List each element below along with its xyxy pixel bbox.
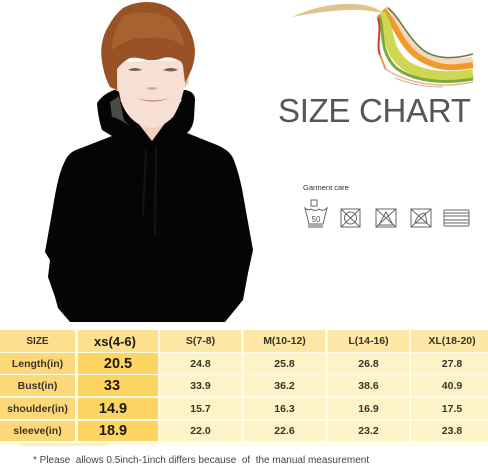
row: sleeve: 22.0 (190, 425, 211, 437)
row: bust: 36.2 (274, 380, 295, 392)
hood lining (110, 96, 130, 126)
row: shoulder: 16.3 (274, 402, 295, 414)
garment care heading: Garment care (303, 183, 349, 192)
row: sleeve: 22.6 (274, 425, 295, 437)
row: sleeve: 23.8 (442, 425, 462, 437)
table bottom strip (20, 443, 108, 446)
icon: do not tumble dry (341, 209, 360, 227)
row: bust: 38.6 (358, 380, 379, 392)
row: sleeve (0, 421, 488, 441)
row: bust: 33.9 (190, 380, 211, 392)
photo: boy in black hoodie (45, 2, 253, 322)
neck (120, 100, 182, 141)
row: bust: 40.9 (442, 380, 462, 392)
eyes and smile (128, 68, 142, 71)
footnote: * Please allows 0.5inch-1inch differs because of the manual measurement (33, 455, 369, 466)
drawstring shading (143, 148, 156, 235)
row: length: 24.8 (190, 358, 211, 370)
icon: flat dry lines (444, 210, 469, 226)
care icons (304, 200, 470, 228)
icon: wash 50: 50 (312, 215, 321, 224)
row: length: 20.5 (104, 356, 132, 372)
row: length: 25.8 (274, 358, 295, 370)
decorative swoosh graphic (292, 4, 474, 88)
size table (0, 330, 488, 446)
ears (108, 68, 119, 92)
row: shoulder (0, 398, 488, 419)
row: bust: Bust(in) (18, 380, 57, 392)
hood and hoodie body (45, 90, 253, 322)
row: shoulder: 14.9 (99, 400, 127, 416)
row: sleeve: 18.9 (99, 423, 127, 439)
face (117, 60, 187, 128)
icon: do not bleach (376, 209, 396, 227)
row: sleeve: sleeve(in) (13, 425, 62, 437)
header row: xs(4-6) (94, 334, 136, 348)
icon: do not iron (411, 209, 431, 227)
row: shoulder: 17.5 (442, 402, 462, 414)
header row: SIZE (26, 336, 49, 346)
row: length (0, 353, 488, 374)
row: length: Length(in) (12, 358, 63, 370)
row: shoulder: 15.7 (190, 402, 211, 414)
header row: XL(18-20) (428, 335, 476, 347)
row: bust: 33 (104, 378, 120, 394)
header row: M(10-12) (263, 335, 306, 347)
header row: S(7-8) (186, 335, 215, 347)
row: length: 26.8 (358, 358, 379, 370)
row: length: 27.8 (442, 358, 462, 370)
row: shoulder: 16.9 (358, 402, 379, 414)
hair (101, 2, 195, 90)
header row: L(14-16) (348, 335, 389, 347)
header row (0, 330, 488, 352)
icon: wash 50 (305, 200, 327, 228)
row: bust (0, 375, 488, 396)
row: sleeve: 23.2 (358, 425, 379, 437)
title: SIZE CHART (278, 92, 471, 129)
row: shoulder: shoulder(in) (7, 402, 68, 414)
